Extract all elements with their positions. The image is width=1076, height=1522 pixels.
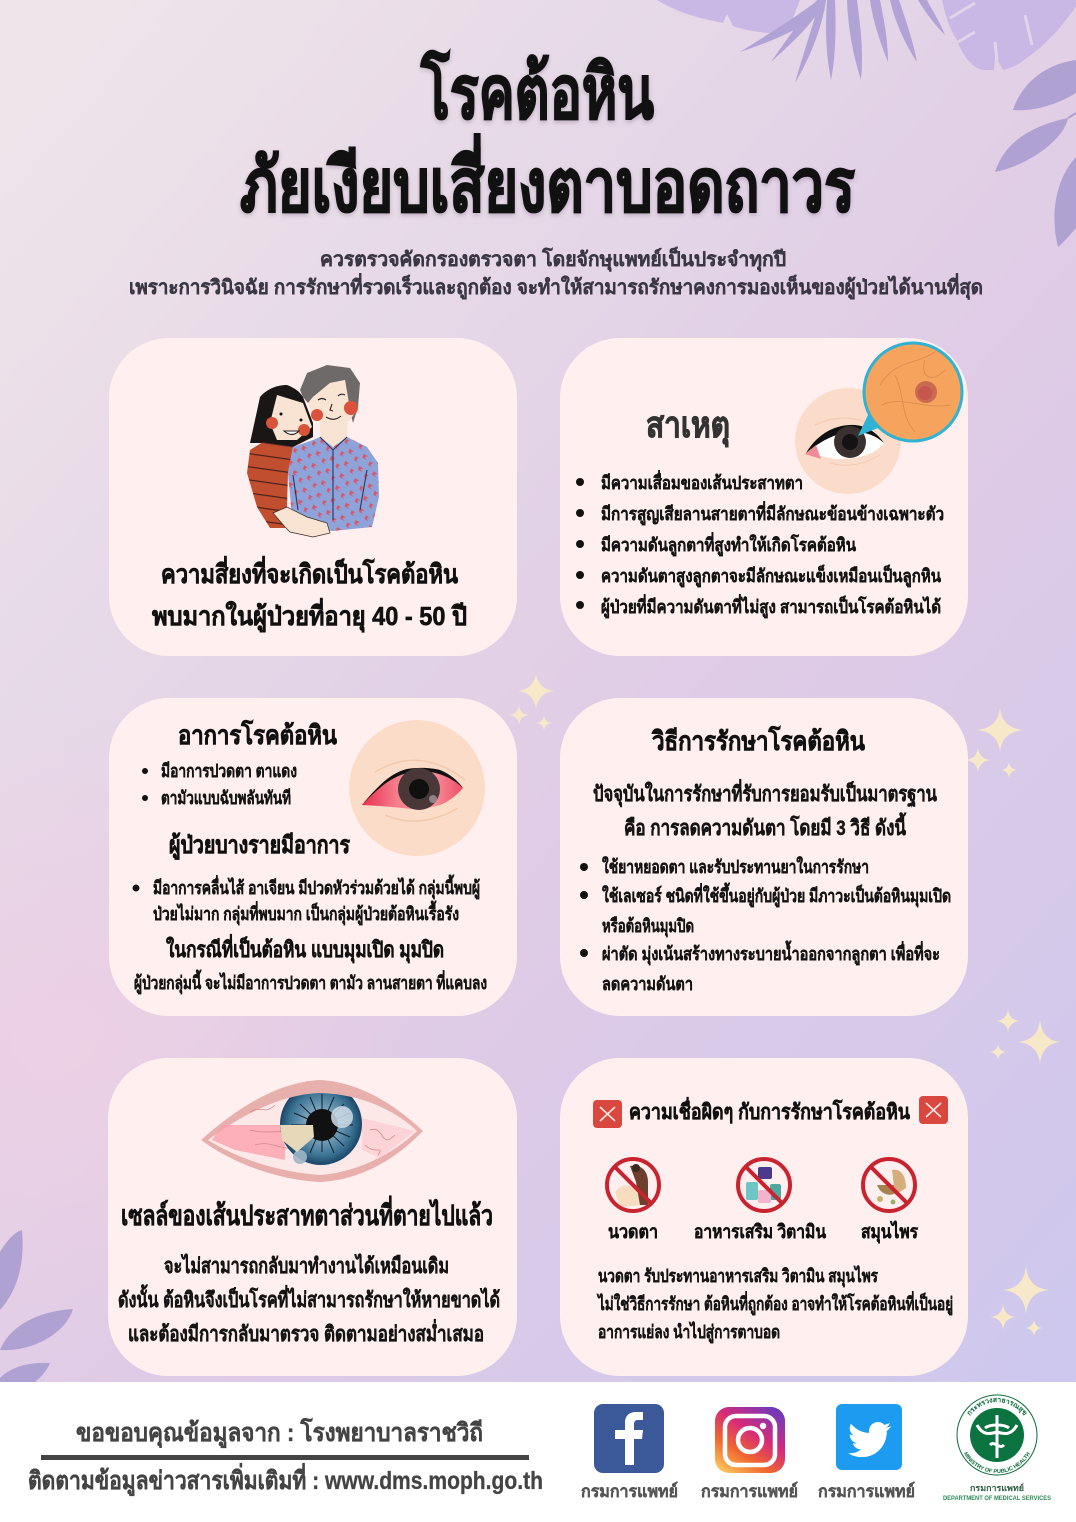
list: causes	[576, 470, 944, 619]
icon: no eye massage	[607, 1159, 659, 1211]
text: other symptoms	[132, 874, 480, 926]
title	[240, 49, 855, 227]
heading: causes: สาเหตุ	[646, 404, 730, 448]
heading: dead nerve cells: เซลล์ของเส้นประสาทตาส่วนที่ตายไปแล้ว	[121, 1195, 493, 1231]
decoration: bottom-left leaves	[0, 1230, 73, 1382]
title: โรคต้อหิน	[420, 49, 654, 134]
list: treatment methods: ใช้ยาหยอดตา และรับประทานยาในการรักษา	[602, 856, 869, 877]
logo: ministry of public health: DEPARTMENT OF MEDICAL SERVICES	[943, 1496, 1051, 1502]
decoration: top leaves	[657, 0, 1076, 83]
list: main symptoms: ตามัวแบบฉับพลันทันที	[161, 788, 291, 808]
list: causes: ความดันตาสูงลูกตาจะมีลักษณะแข็งเหมือนเป็นลูกหิน	[601, 564, 942, 588]
logo: ministry of public health: กระทรวงสาธารณสุข	[968, 1398, 1027, 1416]
icon: red cross left	[593, 1100, 622, 1128]
text: no symptoms note: ผู้ป่วยกลุ่มนี้ จะไม่มีอาการปวดตา ตามัว ลานสายตา ที่แคบลง	[134, 969, 487, 995]
text: misconception details: อาการแย่ลง นำไปสู่การตาบอด	[598, 1321, 780, 1344]
list: treatment methods: ลดความดันตา	[602, 974, 693, 994]
heading: symptoms: อาการโรคต้อหิน	[178, 719, 337, 750]
icon: instagram	[715, 1407, 785, 1473]
title: ภัยเงียบเสี่ยงตาบอดถาวร	[240, 133, 855, 227]
text: cannot be cured: ดังนั้น ต้อหินจึงเป็นโรคที่ไม่สามารถรักษาให้หายขาดได้	[118, 1284, 500, 1312]
logo: ministry of public health: MINISTRY OF PUBLIC HEALTH	[964, 1452, 1030, 1473]
icon: glaucoma eye	[201, 1080, 423, 1182]
list: treatment methods: หรือต้อหินมุมปิด	[602, 916, 694, 938]
subtitle	[129, 246, 983, 301]
icon: red cross right	[919, 1096, 948, 1124]
subheading: open and closed angle: ในกรณีที่เป็นต้อหิน แบบมุมเปิด มุมปิด	[166, 933, 444, 964]
list: causes: ผู้ป่วยที่มีความดันตาที่ไม่สูง สามารถเป็นโรคต้อหินได้	[601, 594, 941, 619]
panel: misconceptions	[560, 1058, 968, 1376]
heading: treatment: วิธีการรักษาโรคต้อหิน	[652, 725, 865, 756]
text: other symptoms: มีอาการคลื่นไส้ อาเจียน มีปวดหัวร่วมด้วยได้ กลุ่มนี้พบผู้	[153, 874, 480, 900]
text: risk age: ความสี่ยงที่จะเกิดเป็นโรคต้อหิน	[161, 555, 458, 589]
list: treatment methods	[580, 856, 951, 994]
panel: symptoms	[109, 698, 517, 1016]
text: treatment intro: ปัจจุบันในการรักษาที่รับการยอมรับเป็นมาตรฐาน	[593, 778, 938, 808]
list: treatment methods: ผ่าตัด มุ่งเน้นสร้างทางระบายน้ำออกจากลูกตา เพื่อที่จะ	[602, 940, 940, 966]
text: cannot be cured: จะไม่สามารถกลับมาทำงานได้เหมือนเดิม	[164, 1253, 449, 1278]
text: misconception details	[596, 1265, 953, 1344]
text: risk age: พบมากในผู้ป่วยที่อายุ 40 - 50 ปี	[152, 597, 467, 633]
text: follow website: ติดตามข้อมูลข่าวสารเพิ่มเติมที่ : www.dms.moph.go.th	[28, 1463, 543, 1497]
text: credit: ขอขอบคุณข้อมูลจาก : โรงพยาบาลราชวิถี	[76, 1417, 483, 1449]
text: misconception details: นวดตา รับประทานอาหารเสริม วิตามิน สมุนไพร	[598, 1265, 878, 1288]
text: treatment intro	[593, 778, 938, 840]
subtitle: เพราะการวินิจฉัย การรักษาที่รวดเร็วและถูกต้อง จะทำให้สามารถรักษาคงการมองเห็นของผู้ป่วยได้นานที่สุด	[129, 272, 983, 301]
icon: facebook	[594, 1404, 664, 1473]
heading: misconceptions: ความเชื่อผิดๆ กับการรักษาโรคต้อหิน	[629, 1096, 911, 1124]
footer	[0, 1382, 1076, 1522]
logo: ministry of public health	[943, 1394, 1051, 1502]
icon: red eye	[349, 720, 485, 856]
labels: social accounts: กรมการแพทย์	[701, 1481, 798, 1501]
list: treatment methods: ใช้เลเซอร์ ชนิดที่ใช้ขึ้นอยู่กับผู้ป่วย มีภาวะเป็นต้อหินมุมเปิด	[602, 882, 951, 908]
labels: misconception items: นวดตา	[608, 1222, 658, 1243]
list: main symptoms: มีอาการปวดตา ตาแดง	[161, 761, 297, 781]
list: causes: มีความดันลูกตาที่สูงทำให้เกิดโรคต้อหิน	[601, 532, 857, 557]
text: risk age	[152, 555, 467, 633]
icon: no supplements	[738, 1159, 790, 1211]
labels: misconception items: สมุนไพร	[861, 1220, 919, 1244]
subtitle: ควรตรวจคัดกรองตรวจตา โดยจักษุแพทย์เป็นประจำทุกปี	[320, 246, 786, 272]
list: causes: มีความเสื่อมของเส้นประสาทตา	[601, 470, 803, 493]
list: causes: มีการสูญเสียลานสายตาที่มีลักษณะข้อนข้างเฉพาะตัว	[601, 501, 944, 526]
list: main symptoms	[142, 761, 297, 808]
icon: eye with retina magnifier	[795, 343, 962, 494]
text: misconception details: ไม่ใช่วิธีการรักษา ต้อหินที่ถูกต้อง อาจทำให้โรคต้อหินที่เป็นอยู่	[596, 1291, 953, 1316]
text: other symptoms: ป่วยไม่มาก กลุ่มที่พบมาก เป็นกลุ่มผู้ป่วยต้อหินเรื้อรัง	[153, 900, 459, 926]
panel: dead nerve cells	[108, 1058, 517, 1376]
panel: treatment	[560, 698, 968, 1016]
icon: twitter	[836, 1404, 902, 1470]
panel: risk age	[109, 338, 517, 656]
decoration: right leaves	[995, 60, 1076, 247]
icon: no herbs	[863, 1159, 915, 1211]
panel: causes	[560, 338, 968, 656]
labels: misconception items: อาหารเสริม วิตามิน	[694, 1222, 826, 1243]
labels: social accounts: กรมการแพทย์	[818, 1481, 915, 1501]
labels: misconception items	[608, 1220, 919, 1244]
text: treatment intro: คือ การลดความดันตา โดยมี 3 วิธี ดังนี้	[624, 812, 907, 840]
labels: social accounts	[581, 1481, 915, 1501]
decoration: sparkles	[509, 673, 1060, 1336]
subheading: some patients: ผู้ป่วยบางรายมีอาการ	[169, 832, 350, 860]
logo: ministry of public health: กรมการแพทย์	[970, 1483, 1024, 1493]
text: cannot be cured: และต้องมีการกลับมาตรวจ ติดตามอย่างสม่ำเสมอ	[128, 1318, 484, 1346]
icon: elderly couple	[247, 365, 379, 537]
labels: social accounts: กรมการแพทย์	[581, 1481, 678, 1501]
text: cannot be cured	[118, 1253, 500, 1346]
